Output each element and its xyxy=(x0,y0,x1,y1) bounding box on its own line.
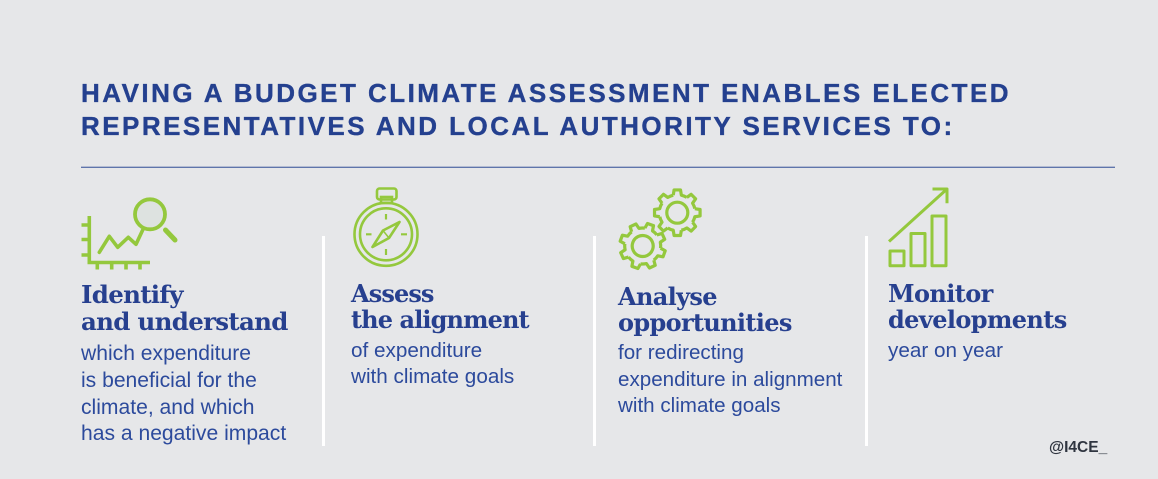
heading: identify xyxy=(81,280,288,336)
text: identify: which expenditure xyxy=(81,342,251,365)
heading: assess: the alignment xyxy=(351,305,529,334)
text: assess: of expenditure xyxy=(351,339,482,362)
heading: analyse: opportunities xyxy=(618,308,792,337)
icon: rising bars with arrow xyxy=(888,188,948,268)
text: monitor: year on year xyxy=(888,339,1003,362)
heading: identify: Identify xyxy=(81,280,183,309)
text: identify xyxy=(81,342,286,445)
heading: identify: and understand xyxy=(81,307,288,336)
title: HAVING A BUDGET CLIMATE ASSESSMENT ENABLES ELECTED xyxy=(81,78,1011,108)
heading: monitor: developments xyxy=(888,305,1067,334)
text: assess: with climate goals xyxy=(351,365,514,388)
text: identify: climate, and which xyxy=(81,396,255,419)
icon: compass xyxy=(353,187,419,268)
text: identify: has a negative impact xyxy=(81,422,286,445)
text: analyse xyxy=(618,341,842,417)
column 2 xyxy=(350,279,530,388)
text: identify: is beneficial for the xyxy=(81,369,257,392)
text: analyse: for redirecting xyxy=(618,341,744,364)
heading: assess: Assess xyxy=(351,279,434,308)
heading: assess xyxy=(350,279,530,334)
credit: @I4CE_ xyxy=(1049,439,1107,456)
heading: analyse xyxy=(618,282,792,337)
icon: chart with magnifying glass xyxy=(82,197,178,270)
heading: monitor xyxy=(888,279,1067,334)
text: assess xyxy=(351,339,514,388)
icon: gears xyxy=(618,188,702,270)
text: analyse: with climate goals xyxy=(618,394,781,417)
column 3 xyxy=(618,282,842,417)
text: analyse: expenditure in alignment xyxy=(618,368,842,391)
heading: analyse: Analyse xyxy=(618,282,717,311)
title xyxy=(81,78,1011,141)
column 1 xyxy=(81,280,288,445)
title: REPRESENTATIVES AND LOCAL AUTHORITY SERVICES TO: xyxy=(81,111,955,141)
heading: monitor: Monitor xyxy=(888,279,993,308)
column 4 xyxy=(888,279,1067,362)
